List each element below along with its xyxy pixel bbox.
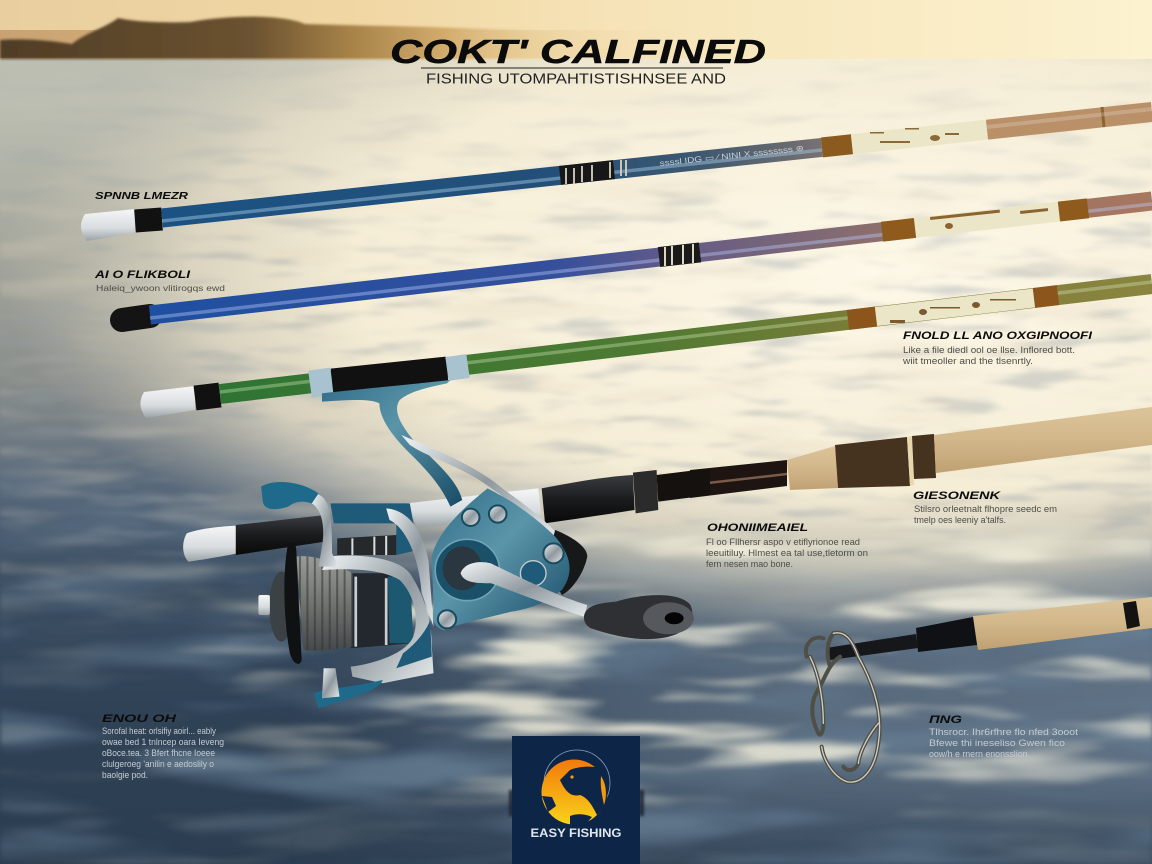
- subtitle: FISHING UTOMPAHTISTISHNSEE AND: [426, 70, 726, 88]
- bail arch: [386, 508, 434, 627]
- lower cork handle: [826, 597, 1152, 660]
- black rod shaft: [690, 460, 787, 498]
- rotor core: [443, 546, 482, 590]
- silver seat behind reel: [406, 488, 542, 527]
- black ferrule: [916, 617, 977, 652]
- gear cylinder: [337, 535, 396, 555]
- heading: ENOU OH: [102, 713, 178, 725]
- line ring: [544, 750, 610, 816]
- body: Tlhsrocr. Ihr6rfhre flo nfed 3ooot: [929, 727, 1079, 737]
- cork rear: [934, 407, 1152, 473]
- rod 3: green to olive: [140, 282, 1152, 418]
- reel seat ring right: [447, 366, 468, 369]
- rod 1 tan tip: [987, 112, 1152, 130]
- ripple warm tones: [0, 206, 1092, 606]
- thin black shaft: [826, 634, 918, 660]
- rod 1 sheen: [162, 150, 822, 221]
- line spool: [297, 556, 352, 651]
- label: upper right: [902, 330, 1093, 366]
- rotor ring: [435, 539, 499, 601]
- label: lower left: [102, 713, 224, 780]
- body: Stilsro orleetnalt flhopre seedc em: [914, 504, 1057, 514]
- spool nut: [258, 595, 270, 615]
- rod 2: blue to mauve: [122, 201, 1152, 320]
- rod 3 lower brown wrap: [848, 317, 876, 320]
- rod 2 blank: [150, 201, 1152, 315]
- reel seat ring left: [310, 381, 332, 384]
- wave highlights, foreground: [0, 520, 1152, 864]
- main cork handle: [690, 407, 1152, 498]
- body: Fl oo Fllhersr aspo v etiflyrionoe read: [706, 537, 860, 547]
- bail teal streak: [396, 620, 432, 668]
- bail roller: [322, 668, 340, 698]
- rod 1 collar: [135, 219, 162, 221]
- rod 3 butt cap: [140, 386, 195, 418]
- body: oow/h e rnern enonsslion.: [929, 749, 1030, 759]
- rod 3 blank: [220, 284, 1152, 394]
- handle arm: [461, 562, 587, 617]
- drum housing: [349, 573, 413, 648]
- rod 1 blank: [162, 147, 822, 218]
- handle knob: [584, 595, 692, 639]
- body: Like a file diedl ool oe llse. Inflored bott.: [903, 345, 1075, 355]
- shaft sheen: [690, 474, 787, 485]
- title block: [390, 33, 766, 88]
- hook highlight: [810, 633, 880, 782]
- sunlit water: [0, 58, 1152, 698]
- ghost text behind logo: [509, 790, 644, 816]
- rod 1 butt cap: [81, 209, 135, 241]
- heading: SPNNB LMEZR: [95, 191, 189, 202]
- gear stripes: [352, 536, 386, 555]
- rod 1 brown wrap: [822, 144, 852, 147]
- body: Haleiq_ywoon vlitirogqs ewd: [96, 283, 225, 293]
- orange sun disc: [542, 760, 606, 824]
- upper housing: [330, 503, 418, 555]
- ghost left: [509, 790, 513, 816]
- label: ring: [929, 714, 1079, 759]
- body: baolgie pod.: [102, 770, 148, 780]
- left notch: [542, 796, 556, 812]
- rear butt silver: [183, 526, 237, 562]
- fin accent: [601, 776, 606, 805]
- rod 3 sheen: [220, 282, 1152, 392]
- bottom notch: [570, 814, 592, 826]
- cork grip: [973, 597, 1152, 650]
- body: Sorofal heat: orlsifiy aoirl... eably: [102, 726, 216, 736]
- body: clulgeroeg 'anilin e aedoslily o: [102, 759, 214, 769]
- heading: FNOLD LL ANO OXGIPNOOFI: [903, 330, 1093, 342]
- rod 2 upper brown wrap: [1059, 208, 1088, 212]
- rod 1 ring: [1102, 107, 1104, 127]
- body: owae bed 1 tnlncep oara Ieveng: [102, 737, 224, 747]
- icon: hook and snap: [806, 633, 880, 782]
- ripple shadows, near horizon: [2, 80, 1152, 608]
- bail arm: [322, 555, 434, 683]
- heading: GIESONENK: [913, 490, 1001, 502]
- sky: [0, 0, 1152, 59]
- bail post: [312, 493, 339, 567]
- body: oBoce.tea. 3 Bfert fhcne Ioeee: [102, 748, 215, 758]
- logo wordmark: EASY FISHING: [530, 828, 622, 840]
- housing silver lines: [356, 577, 386, 647]
- spinning reel: [183, 380, 710, 708]
- collar: [633, 470, 658, 513]
- navy fish silhouette: [560, 767, 608, 815]
- rod 1 decor: [870, 128, 959, 143]
- ghost right: [639, 790, 644, 816]
- rear butt black: [236, 515, 325, 555]
- rod 1 wrap accents: [566, 160, 626, 184]
- rod 1 printed text: ssssl IDG ▭ ∕ NINI X ssssssss ⊛: [659, 144, 804, 168]
- title: COKT' CALFINED: [390, 33, 766, 70]
- wave shadows, foreground: [0, 510, 1152, 864]
- rod 1 cream section: [852, 130, 987, 144]
- logo: Easy Fishing: [512, 736, 640, 864]
- cream ring: [907, 436, 914, 486]
- body: Bfewe thi ineseliso Gwen fico: [929, 738, 1065, 748]
- rod 3 cream section: [876, 298, 1034, 317]
- stem: [322, 380, 462, 507]
- horizon glow: [0, 30, 1152, 58]
- drive hub: [520, 561, 546, 586]
- label: grip: [913, 490, 1057, 525]
- body: fern nesen mao bone.: [706, 559, 793, 569]
- spool line wraps: [297, 556, 352, 651]
- knob hole: [665, 612, 684, 624]
- rod 3 collar: [195, 395, 220, 398]
- rod 1: blue to tan: [81, 107, 1152, 241]
- tree line: [0, 17, 560, 59]
- reel body: [432, 488, 570, 630]
- label: all-round rod: [94, 269, 225, 293]
- lower right water: [376, 554, 1152, 864]
- brown band: [912, 434, 936, 479]
- logo panel: [512, 736, 640, 864]
- foregrip: [542, 475, 635, 523]
- rod 2 black wraps: [659, 252, 700, 257]
- spool flange: [284, 543, 302, 664]
- cork front: [787, 446, 838, 490]
- rod 2 lower brown wrap: [882, 228, 915, 232]
- silver arm: [401, 435, 557, 538]
- housing teal: [388, 577, 413, 643]
- title rule: [421, 67, 723, 69]
- rod 3 decor: [890, 299, 1016, 323]
- rod 2 decor: [930, 208, 1048, 229]
- rod 2 wrap accents: [665, 244, 693, 266]
- rod 2 sheen: [150, 204, 1152, 318]
- hook outline: [806, 633, 880, 782]
- heading: OHONIIMEAIEL: [707, 522, 808, 534]
- fish eye: [570, 775, 574, 779]
- reel seat black: [332, 369, 447, 381]
- body: leeuitiluy. Hlmest ea tal use,tletorm on: [706, 548, 868, 558]
- black back plate: [545, 530, 587, 595]
- body screws: [438, 505, 564, 628]
- rod 2 cream section: [915, 212, 1059, 228]
- body: tmelp oes leeniy a'talfs.: [914, 515, 1006, 525]
- spool face: [269, 572, 294, 642]
- label: centre: [706, 522, 868, 569]
- rod 2 butt: [122, 316, 150, 320]
- body: wiit tmeoller and the tlsenrtly.: [902, 356, 1033, 366]
- bottom bail clip: [314, 680, 383, 708]
- rod 3 upper brown wrap: [1034, 295, 1058, 298]
- rod 1 black wraps: [560, 170, 614, 175]
- heading: AI O FLIKBOLI: [94, 269, 191, 281]
- black ring: [1123, 601, 1140, 629]
- top bail clip: [261, 482, 319, 509]
- heading: ΠNG: [929, 714, 963, 726]
- brown grip: [835, 437, 910, 488]
- rod 1 tip sheen: [987, 109, 1152, 127]
- knob cap: [643, 602, 694, 634]
- shaft to handle: [657, 468, 710, 502]
